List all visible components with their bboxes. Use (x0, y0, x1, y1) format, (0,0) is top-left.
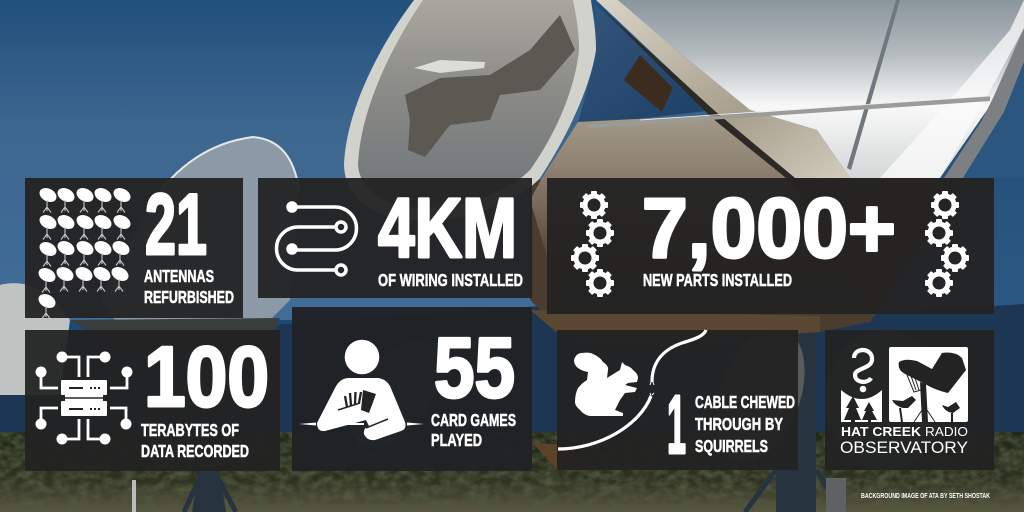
icon: person holding cards (299, 340, 424, 440)
label: cable chewed through by squirrels: CABLE CHEWED (695, 392, 795, 412)
label: antennas refurbished: REFURBISHED (144, 287, 234, 307)
label: terabytes of data recorded: TERABYTES OF (141, 420, 239, 440)
canvas flap (596, 0, 850, 178)
panel: squirrel cable (557, 330, 798, 471)
label: antennas refurbished (144, 266, 234, 307)
panel: wiring (258, 178, 532, 298)
icon: logo dot (860, 386, 866, 392)
icon: chewed cable (558, 330, 706, 449)
label: antennas refurbished: ANTENNAS (144, 266, 214, 286)
panel: antennas (25, 177, 243, 318)
panel: card games (292, 307, 532, 471)
label: of wiring installed: OF WIRING INSTALLED (378, 270, 523, 290)
tube: blue panel and lower metal (578, 5, 715, 125)
label: new parts installed: NEW PARTS INSTALLED (643, 270, 792, 290)
label: cable chewed through by squirrels: THROUGH BY (695, 414, 783, 434)
panel: new parts (547, 178, 994, 314)
panel: squirrel cable: 1 (667, 378, 686, 471)
left dish (100, 137, 299, 340)
number: 55: 55 (434, 321, 515, 416)
label: terabytes of data recorded (141, 420, 249, 461)
number: 21: 21 (145, 177, 207, 273)
number: 4km: 4KM (378, 181, 517, 275)
underside of big dish (530, 178, 965, 340)
number: 7,000+: 7,000+ (642, 181, 896, 275)
label: cable chewed through by squirrels (695, 392, 795, 456)
label: card games played: PLAYED (431, 430, 482, 450)
icon: squirrel (574, 353, 638, 416)
text: hat creek radio: HAT CREEK (841, 425, 921, 439)
icon: data server with nodes (36, 352, 132, 444)
strut (586, 96, 990, 128)
label: card games played: CARD GAMES (431, 410, 516, 430)
text: hat creek radio (841, 425, 968, 439)
icon: wires (276, 203, 356, 275)
icon: logo forest block (841, 390, 882, 423)
icon: logo antennas block (889, 347, 968, 422)
reflector (618, 0, 1024, 178)
text: hat creek radio: RADIO (925, 425, 968, 439)
text: observatory: OBSERVATORY (840, 439, 968, 457)
panel: observatory logo (825, 330, 994, 470)
ghost dishes (332, 326, 458, 464)
number: 100: 100 (144, 330, 269, 425)
label: terabytes of data recorded: DATA RECORDED (141, 441, 249, 461)
icon: logo feed hook (854, 350, 872, 382)
icon: 21 antennas (36, 185, 133, 318)
label: card games played (431, 410, 516, 450)
label: cable chewed through by squirrels: SQUIRRELS (695, 436, 768, 456)
icon: left gears (571, 191, 614, 297)
icon: right gears (925, 191, 969, 297)
panel: terabytes (25, 330, 280, 471)
reflector rim (944, 28, 1024, 178)
dish mouth rim (344, 0, 596, 221)
